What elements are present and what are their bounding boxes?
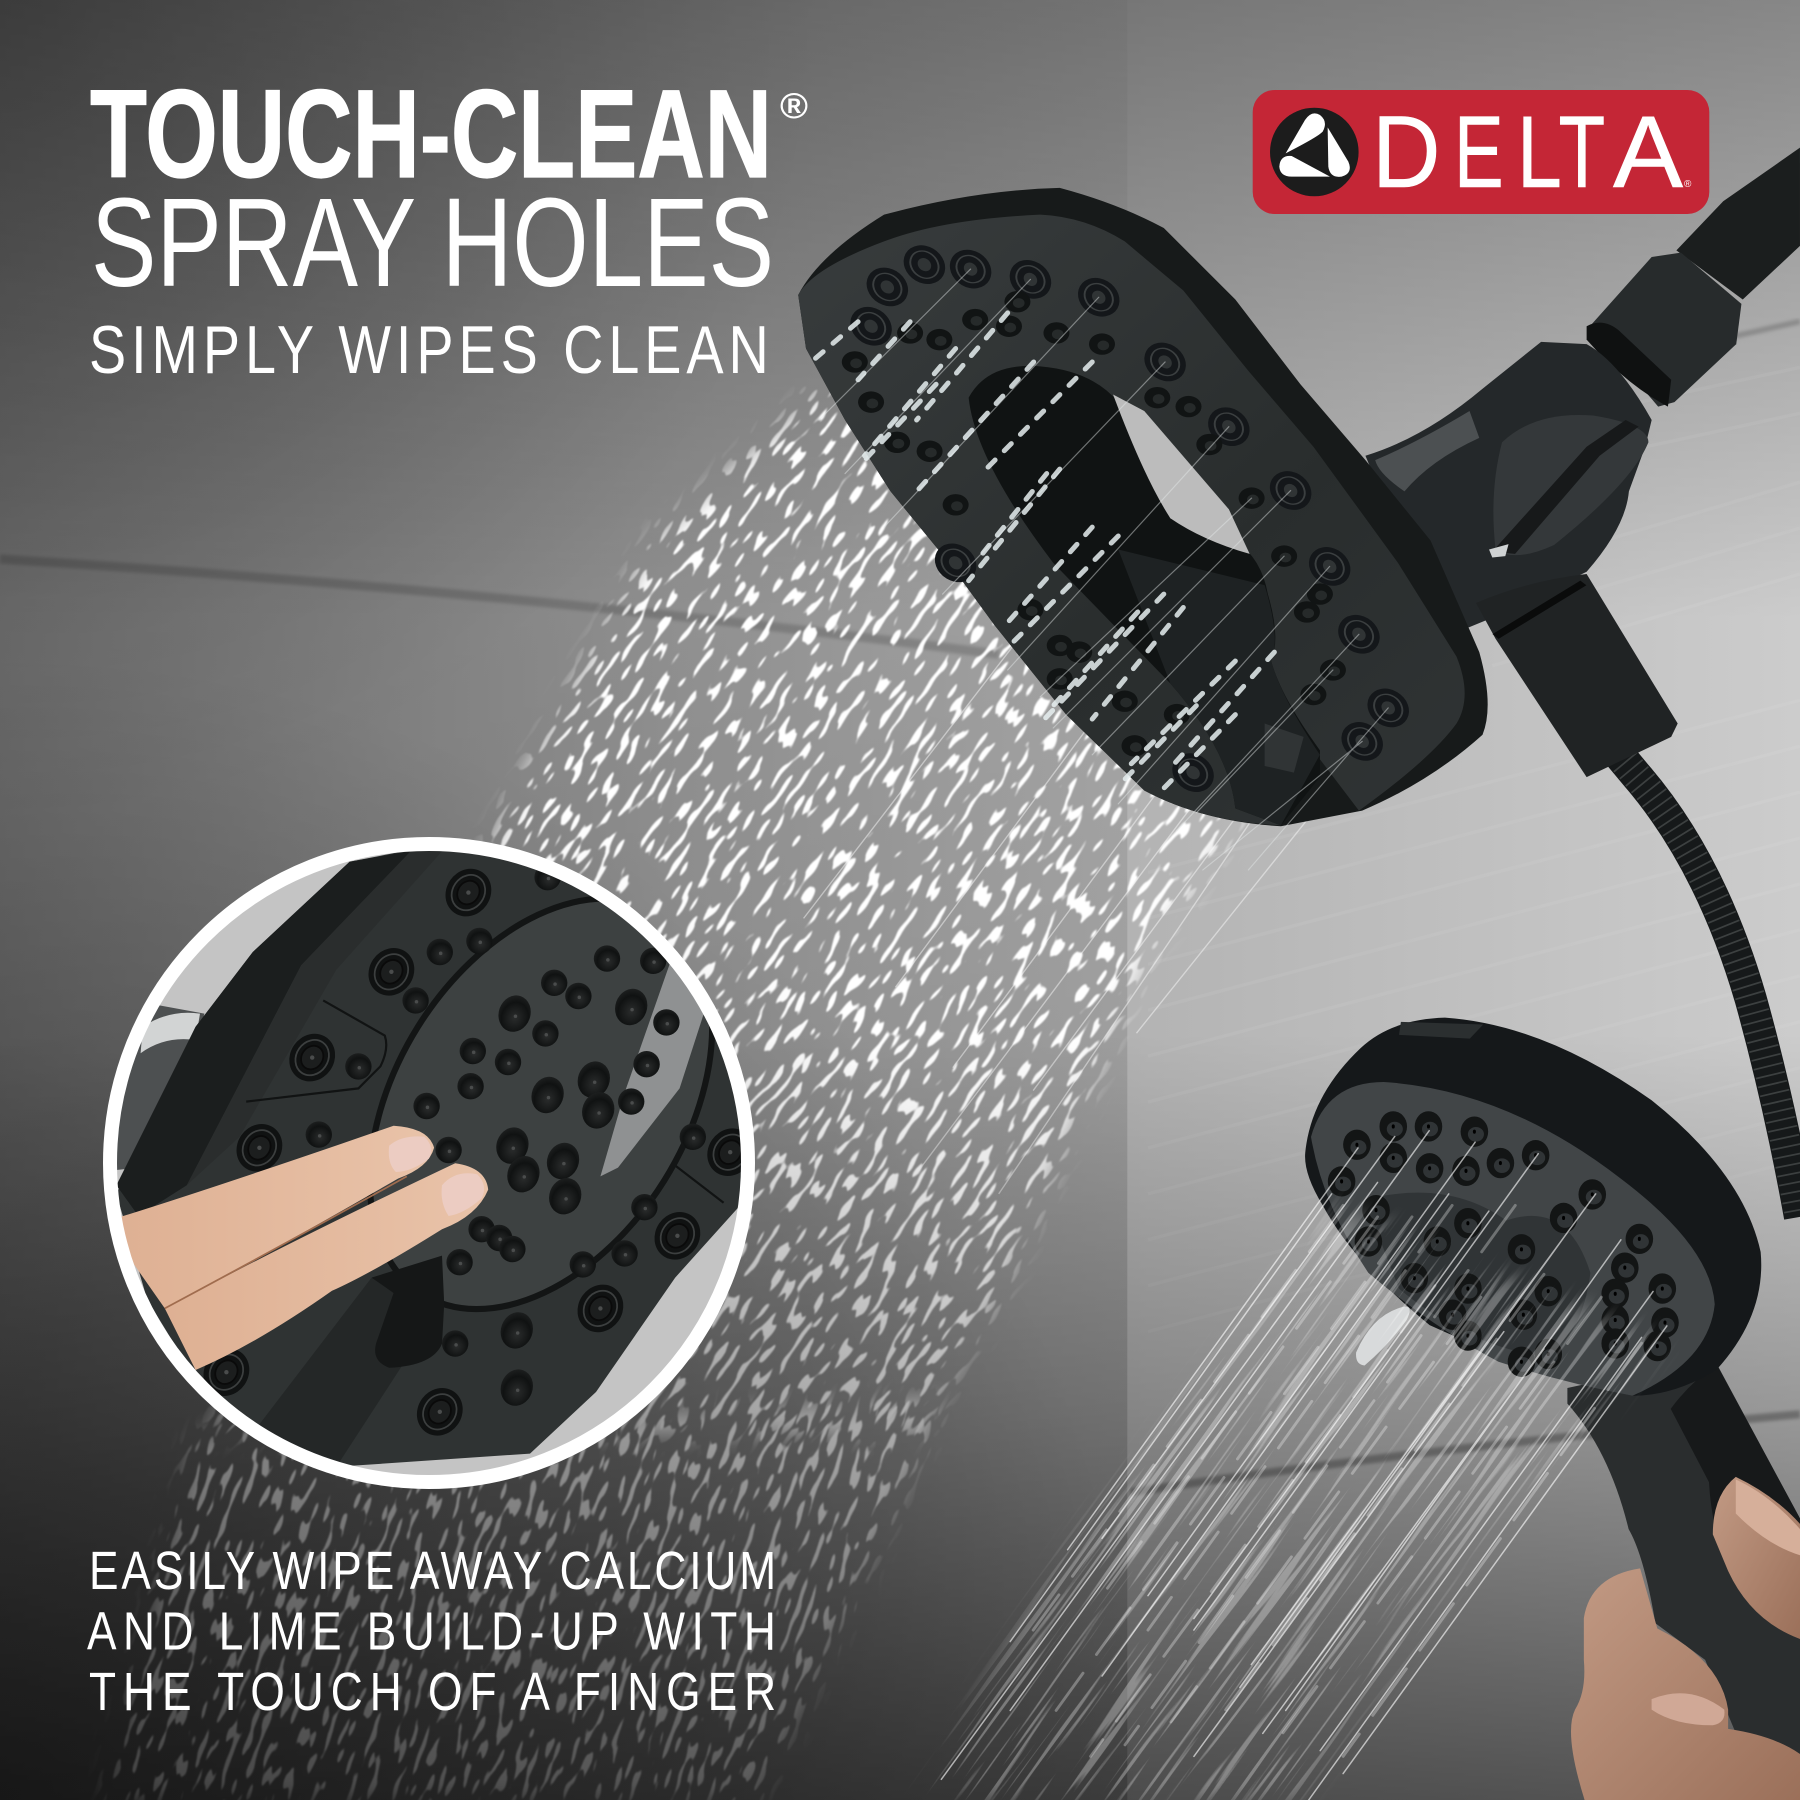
body copy: [87, 1541, 776, 1722]
logo registered mark: ®: [1684, 179, 1692, 190]
lower holder: [1476, 574, 1678, 777]
view through opening: [1113, 395, 1250, 554]
upper droplets: [801, 918, 807, 925]
logo wordmark: T: [1558, 95, 1605, 210]
inner face disc: [1365, 1193, 1590, 1357]
beaded jet streams: [806, 313, 1274, 795]
lower rim strip: [260, 1278, 401, 1462]
head body: [116, 838, 759, 1467]
nozzles: [1328, 1111, 1679, 1377]
cradle docking slot: [1265, 724, 1304, 773]
inset circle: finger wiping spray holes: [103, 837, 755, 1489]
body copy: EASILY WIPE AWAY CALCIUM: [89, 1541, 776, 1601]
water spray from rain shower head: [458, 620, 1366, 1613]
water jets over rain shower face: [806, 269, 1388, 870]
body copy: THE TOUCH OF A FINGER: [89, 1662, 776, 1722]
center spray disc: [368, 896, 715, 1312]
swivel body: [1365, 342, 1652, 630]
logo wordmark: E: [1454, 94, 1504, 209]
registered mark: ®: [780, 85, 808, 126]
Delta logo badge: [1253, 90, 1709, 214]
thumb: [1713, 1477, 1800, 1639]
lower finger: [165, 1163, 488, 1370]
holder ring: [1496, 583, 1583, 636]
logo wordmark: L: [1517, 96, 1562, 209]
water streams from hand shower: [941, 1131, 1667, 1800]
shower arm and swivel mount: [1365, 148, 1800, 777]
inset photo: [117, 851, 741, 1475]
fingernails: [389, 1136, 431, 1172]
inset white ring: [110, 844, 748, 1482]
hose: [1607, 740, 1800, 1217]
face plate: [1311, 1082, 1715, 1396]
handle grip dark panel: [1671, 1364, 1800, 1634]
bottom vignette shading: [0, 574, 1800, 1800]
heading: TOUCH-CLEAN: TOUCH-CLEAN: [90, 65, 772, 204]
upper finger: [116, 1126, 434, 1308]
large ringed nozzles: [845, 242, 1415, 795]
shower head back rim: [798, 188, 1488, 826]
face segment seams: [246, 1000, 724, 1203]
thin jet lines: [819, 269, 1388, 870]
long thin jets: [804, 620, 1366, 1194]
upper pipe: [1676, 148, 1800, 299]
rain shower head: [798, 188, 1488, 826]
head rim band: [116, 851, 411, 1216]
solid nozzles: [306, 864, 706, 1410]
lower droplets: [458, 1607, 463, 1613]
chrome mode lever: [1356, 1307, 1410, 1365]
ring nozzles: [194, 860, 762, 1445]
chrome reflection: [600, 961, 704, 1176]
logo wordmark: [1372, 94, 1683, 210]
logo wordmark: D: [1372, 95, 1441, 209]
chrome arm behind head: [117, 1006, 204, 1170]
central cradle opening: [969, 366, 1320, 825]
finger crease: [165, 1176, 407, 1308]
logo wordmark: A: [1613, 94, 1683, 209]
swivel disc: [1493, 415, 1648, 555]
outer shell: [1305, 1018, 1761, 1396]
heading: SPRAY HOLES: SPRAY HOLES: [91, 172, 774, 313]
shower head spray face: [798, 215, 1465, 825]
collar ring: [1587, 323, 1671, 407]
fingernail: [1652, 1693, 1725, 1725]
top shell slot: [1399, 1022, 1483, 1039]
small nozzles: [842, 291, 1346, 757]
center lever: [372, 1256, 444, 1368]
fingers gripping handle: [1571, 1568, 1800, 1800]
logo mark: [1270, 108, 1359, 196]
inner cradle face: [1118, 549, 1320, 825]
subheading: SIMPLY WIPES CLEAN: [89, 313, 769, 388]
thumbnail: [1736, 1479, 1800, 1555]
hand shower head: [1305, 1018, 1761, 1396]
body copy: AND LIME BUILD-UP WITH: [87, 1601, 776, 1662]
lever glint: [1489, 544, 1509, 557]
hand shower handle and hand: [1567, 1357, 1800, 1800]
swivel lever edge: [1492, 420, 1639, 554]
chrome highlight: [1375, 411, 1479, 491]
threaded collar: [1590, 253, 1741, 407]
handle: [1567, 1357, 1800, 1754]
